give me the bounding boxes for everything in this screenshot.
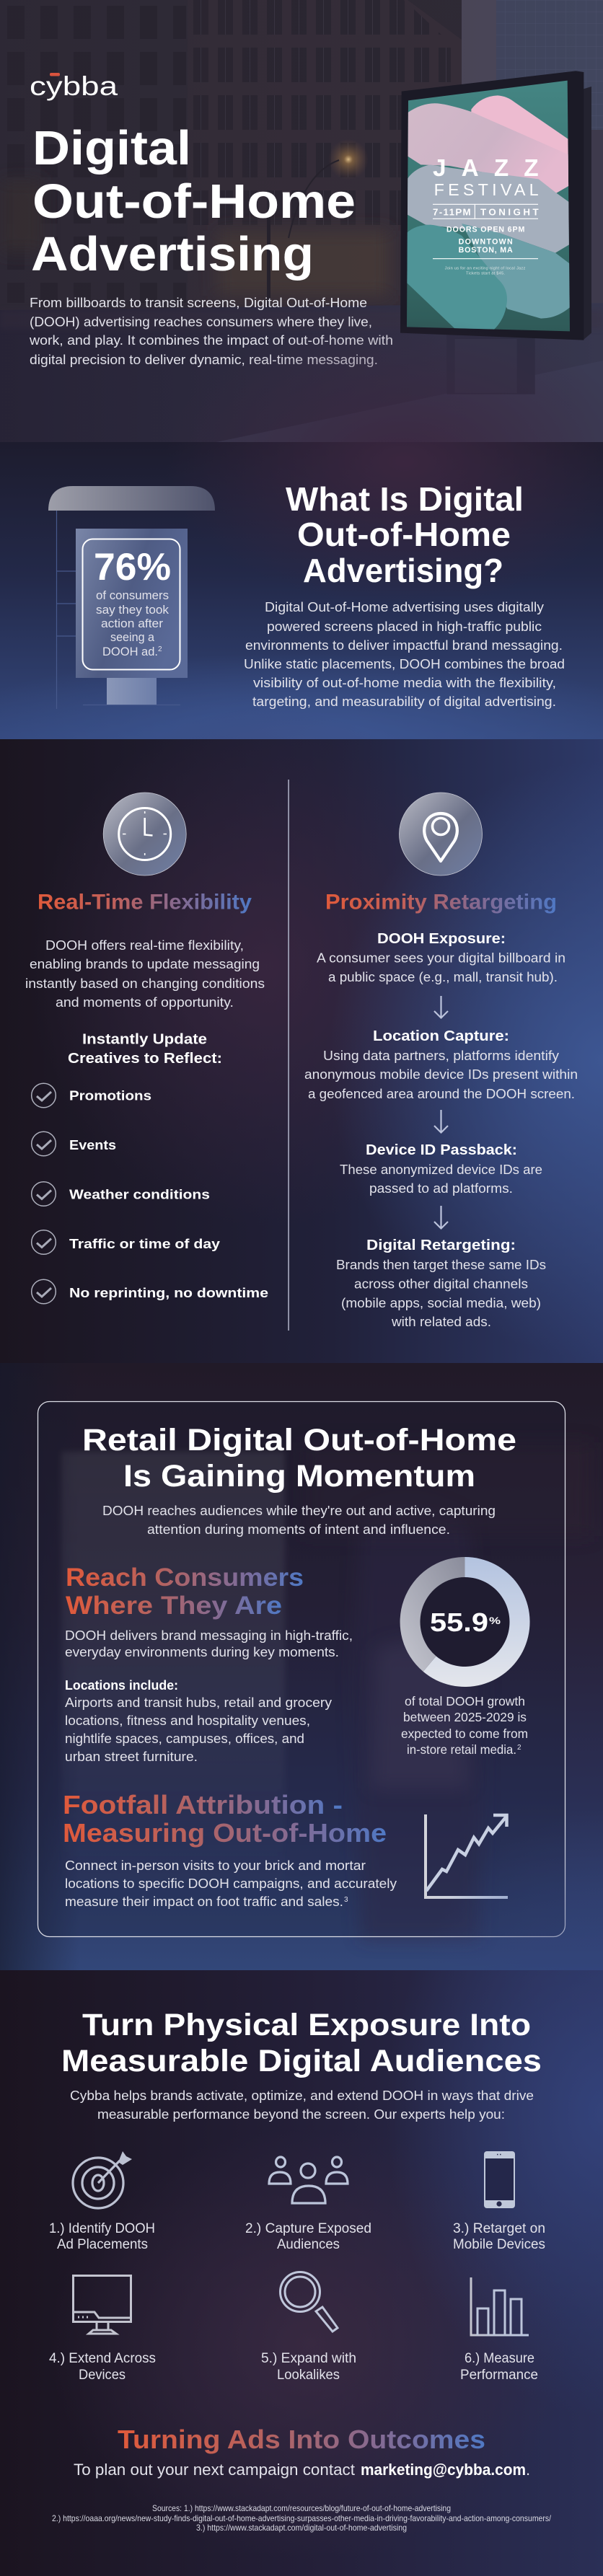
donut caption: 2 [517,1744,521,1752]
label: 1.) Identify DOOH [49,2221,155,2236]
locations list [65,1678,332,1764]
title: Advertising [31,227,314,281]
label [261,2351,356,2383]
illustration: 76% stat billboard [48,486,215,709]
poster text: TONIGHT [480,206,539,217]
hero intro text: work, and play. It combines the impact of out-of-home with [29,333,393,348]
step: location capture: Location Capture: [373,1028,509,1044]
reach text: DOOH delivers brand messaging in high-traffic, [65,1628,353,1643]
label [245,2221,371,2252]
heading: What Is Digital [286,480,524,518]
body text: targeting, and measurability of digital advertising. [252,694,556,709]
body text: Digital Out-of-Home advertising uses digitally [265,600,544,614]
description: and moments of opportunity. [56,995,234,1010]
footfall text [65,1858,397,1909]
title [31,121,356,281]
description: enabling brands to update messaging [30,957,260,971]
locations list: nightlife spaces, campuses, offices, and [65,1732,304,1746]
hero intro text: (DOOH) advertising reaches consumers where they live, [30,314,372,329]
intro [102,1504,496,1537]
stat caption: DOOH ad. [102,645,158,658]
icon: phone [484,2151,515,2208]
panel: retail momentum [0,1363,603,1970]
item: promotions: Promotions [69,1089,151,1103]
donut chart: 55.9%: % [489,1615,501,1626]
intro: attention during moments of intent and influence. [147,1522,450,1537]
poster text: Tickets start at $45. [466,272,505,276]
step: device id passback [340,1142,542,1196]
poster text: FESTIVAL [434,180,539,199]
logo: cybba: cybba [30,71,118,101]
donut caption [401,1694,528,1757]
subheading: footfall attribution: Footfall Attribution - [63,1790,343,1819]
subheading [68,1031,222,1067]
poster text: DOORS OPEN 6PM [446,225,524,234]
step: digital retargeting: Digital Retargeting: [366,1238,516,1253]
icon: target [73,2151,132,2208]
subheading: footfall attribution [63,1790,387,1848]
donut caption: expected to come from [401,1726,528,1741]
poster text: 7-11PM [433,206,471,217]
step: digital retargeting [336,1238,546,1329]
subheading: Creatives to Reflect: [68,1051,222,1067]
step: location capture: anonymous mobile device IDs present within [304,1067,578,1082]
sources: 3.) https://www.stackadapt.com/digital-out-of-home-advertising [196,2523,407,2533]
donut chart: 55.9% [400,1557,530,1687]
step: digital retargeting: across other digital channels [354,1276,528,1291]
donut caption: of total DOOH growth [405,1694,525,1708]
hero intro text: From billboards to transit screens, Digital Out-of-Home [30,296,367,310]
item: events: Events [69,1138,116,1152]
footfall text: 3 [344,1896,348,1904]
item: no reprinting: No reprinting, no downtime [69,1286,268,1300]
icon: people [269,2157,348,2203]
stat caption: say they took [96,604,170,617]
arrow [434,1206,448,1229]
label: Lookalikes [277,2368,340,2383]
stat caption: 2 [158,645,162,653]
reach text: everyday environments during key moments. [65,1645,339,1659]
item: events [32,1132,116,1156]
stat caption: of consumers [96,589,169,602]
retail background photo [0,1363,603,1970]
poster text: BOSTON, MA [459,246,513,255]
label: 2.) Capture Exposed [245,2221,371,2236]
item: traffic or time of day [32,1230,220,1254]
item 5: lookalikes [261,2272,356,2383]
label [49,2351,156,2383]
heading: Out-of-Home [297,516,511,553]
item 3: retarget mobile [453,2151,545,2252]
step: dooh exposure: a public space (e.g., mall, transit hub). [328,970,558,984]
locations list: Locations include: [65,1678,178,1693]
column: real-time flexibility [25,793,268,1304]
call to action: marketing@cybba.com [361,2461,526,2479]
heading: Advertising? [303,552,503,589]
subheading: reach consumers: Reach Consumers [66,1563,304,1592]
item 4: extend devices [49,2276,156,2383]
title: Digital [32,121,191,175]
closing heading: Turning Ads Into Outcomes [118,2425,485,2454]
heading: Measurable Digital Audiences [61,2044,542,2078]
call to action: . [526,2461,530,2479]
step: location capture [304,1028,578,1101]
poster text [433,155,539,276]
poster text: JAZZ [433,155,539,182]
intro: DOOH reaches audiences while they're out and active, capturing [102,1504,496,1518]
arrow [434,996,448,1018]
body text: Unlike static placements, DOOH combines the broad [244,657,565,671]
donut caption: between 2025-2029 is [403,1710,527,1724]
item 1: identify placements [49,2151,155,2252]
checklist [32,1083,268,1304]
step: device id passback: Device ID Passback: [366,1142,517,1158]
step: location capture: Using data partners, platforms identify [323,1049,559,1063]
icon: growth line chart [426,1814,508,1897]
heading: Real-Time Flexibility [38,890,252,914]
call to action: To plan out your next campaign contact [74,2461,355,2479]
footfall text: locations to specific DOOH campaigns, and accurately [65,1876,397,1891]
stat caption: action after [101,617,164,630]
label: 6.) Measure [465,2351,534,2366]
item 2: capture audiences [245,2157,371,2252]
heading [82,1423,516,1494]
icon: monitor [74,2276,131,2334]
panel: hero [0,0,603,442]
stat caption: seeing a [110,631,155,644]
call to action [74,2461,530,2479]
footfall text: Connect in-person visits to your brick and mortar [65,1858,366,1873]
description [25,938,265,1010]
locations list: urban street furniture. [65,1750,198,1764]
panel: flexibility and retargeting [0,707,603,1363]
item 6: measure performance [460,2277,538,2383]
body text: visibility of out-of-home media with the flexibility, [253,676,556,690]
label: 3.) Retarget on [453,2221,545,2236]
locations list: locations, fitness and hospitality venues, [65,1713,310,1728]
icon: bar chart [471,2277,529,2335]
hero intro text: digital precision to deliver dynamic, real-time messaging. [30,353,378,367]
content card [38,1402,565,1937]
label: Devices [79,2368,126,2383]
step: dooh exposure [317,931,565,984]
step: location capture: a geofenced area around the DOOH screen. [308,1087,575,1101]
stat caption [96,589,170,658]
label: 4.) Extend Across [49,2351,156,2366]
intro: measurable performance beyond the screen. Our experts help you: [97,2107,505,2122]
intro [70,2088,534,2122]
hero intro text [29,296,393,367]
step: device id passback: These anonymized device IDs are [340,1163,542,1177]
item: promotions [32,1083,151,1108]
label [453,2221,545,2252]
title: Out-of-Home [32,175,356,229]
step: digital retargeting: Brands then target these same IDs [336,1258,546,1272]
icon: clock [103,793,186,875]
subheading: Instantly Update [82,1031,207,1047]
step: digital retargeting: (mobile apps, social media, web) [341,1296,541,1310]
heading: Retail Digital Out-of-Home [82,1423,516,1457]
label: Mobile Devices [453,2237,545,2252]
description: instantly based on changing conditions [25,976,265,991]
intro: Cybba helps brands activate, optimize, and extend DOOH in ways that drive [70,2088,534,2103]
step: device id passback: passed to ad platforms. [369,1181,513,1196]
step: digital retargeting: with related ads. [391,1315,491,1329]
heading: Proximity Retargeting [325,890,557,914]
item: traffic or time of day: Traffic or time of day [69,1237,220,1251]
label: 5.) Expand with [261,2351,356,2366]
label: Ad Placements [57,2237,148,2252]
step: dooh exposure: A consumer sees your digital billboard in [317,950,565,965]
reach text [65,1628,353,1659]
subheading: footfall attribution: Measuring Out-of-Home [63,1818,387,1848]
icon: magnifier [280,2272,338,2332]
panel: what is digital out-of-home [0,317,603,826]
label: Audiences [277,2237,340,2252]
sources: Sources: 1.) https://www.stackadapt.com/resources/blog/future-of-out-of-home-advertising [152,2503,451,2513]
body text: environments to deliver impactful brand messaging. [245,638,563,653]
hero background street photo [0,0,603,442]
description: DOOH offers real-time flexibility, [45,938,244,953]
label [460,2351,538,2383]
donut chart: 55.9%: 55.9 [430,1607,488,1637]
heading: Is Gaining Momentum [123,1459,475,1494]
label: Performance [460,2368,538,2383]
donut caption: in-store retail media. [407,1742,516,1757]
item: no reprinting [32,1279,268,1304]
heading [286,480,524,589]
arrow [434,1110,448,1132]
body text: powered screens placed in high-traffic public [267,619,542,634]
panel: measurable digital audiences [0,1810,603,2576]
label [49,2221,155,2252]
item: weather conditions: Weather conditions [69,1187,210,1201]
poster text: Join us for an exciting night of local Jazz [445,267,526,271]
icon: location pin [400,793,482,875]
body text [244,600,565,709]
poster text: DOWNTOWN [459,238,513,247]
column: proximity retargeting [304,793,578,1329]
item: weather conditions [32,1182,210,1206]
heading [61,2008,542,2078]
subheading: reach consumers [66,1563,304,1620]
heading: Turn Physical Exposure Into [82,2008,531,2042]
subheading: reach consumers: Where They Are [66,1592,282,1620]
sources [52,2503,552,2533]
billboard with jazz festival poster [400,71,591,394]
locations list: Airports and transit hubs, retail and grocery [65,1695,332,1710]
step: dooh exposure: DOOH Exposure: [377,931,506,947]
stat number: 76% [94,546,171,588]
footfall text: measure their impact on foot traffic and sales. [65,1894,343,1909]
